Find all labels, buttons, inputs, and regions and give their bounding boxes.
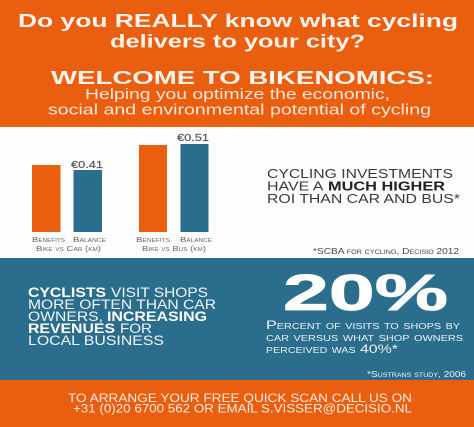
subheading: social and environmental potential of cycling xyxy=(48,102,431,118)
text: ROI statement: MUCH HIGHER xyxy=(328,178,446,194)
panel: header xyxy=(0,0,474,127)
text: statistic description: perceived was 40%* xyxy=(266,342,398,356)
statistic: 20 percent: 20% xyxy=(283,264,448,321)
heading: welcome: WELCOME TO BIKENOMICS: xyxy=(51,68,434,88)
bar: balance bus xyxy=(180,144,208,232)
heading: question: Do you REALLY know what cycling xyxy=(18,11,458,31)
text: ROI statement: CYCLING INVESTMENTS xyxy=(267,166,453,181)
text: cyclists statement: VISIT SHOPS xyxy=(111,285,208,300)
panel: call to action xyxy=(0,380,474,427)
axis labels: bike vs bus: Bike vs Bus (km) xyxy=(142,244,207,253)
panel: ROI chart section xyxy=(0,127,474,258)
text: cyclists statement: MORE OFTEN THAN CAR xyxy=(28,297,216,312)
text: cyclists statement: FOR xyxy=(120,321,152,336)
subheading: Helping you optimize the economic, xyxy=(85,87,390,103)
axis labels: bike vs bus: Balance xyxy=(180,235,213,244)
bar: benefits car xyxy=(32,165,60,232)
text: ROI statement: HAVE A xyxy=(267,178,327,194)
text: contact details: TO ARRANGE YOUR FREE QUICK SCAN CALL US ON xyxy=(68,393,412,405)
text: cyclists statement: INCREASING xyxy=(107,309,207,324)
axis labels: bike vs car: Balance xyxy=(73,235,107,244)
text: cyclists statement: OWNERS, xyxy=(28,309,103,324)
text: contact details: +31 (0)20 6700 562 OR EMAIL S.VISSER@DECISIO.NL xyxy=(73,404,413,416)
text: cyclists statement: CYCLISTS xyxy=(28,285,106,300)
text: cyclists statement: REVENUES xyxy=(28,321,115,336)
bar: benefits bus xyxy=(139,145,167,232)
value: 0.41: €0.41 xyxy=(71,159,103,171)
bar: balance car xyxy=(74,170,102,232)
bar chart: bike vs bus xyxy=(136,132,213,253)
text: cyclists statement: LOCAL BUSINESS xyxy=(28,333,164,348)
axis labels: bike vs bus: Benefits xyxy=(136,235,171,244)
axis labels: bike vs car: Bike vs Car (km) xyxy=(36,244,102,253)
text: statistic description: car versus what shop owners xyxy=(266,330,463,344)
panel: retail section xyxy=(0,258,474,380)
footnote: SCBA source: *SCBA for cycling, Decisio 2012 xyxy=(313,246,459,256)
text: ROI statement: ROI THAN CAR AND BUS* xyxy=(267,191,460,206)
heading: question: delivers to your city? xyxy=(110,32,365,52)
axis labels: bike vs car: Benefits xyxy=(32,235,66,244)
bar chart: bike vs car xyxy=(32,159,107,253)
text: statistic description: Percent of visits to shops by xyxy=(266,318,461,332)
value: 0.51: €0.51 xyxy=(177,132,209,144)
footnote: Sustrans source: *Sustrans study, 2006 xyxy=(367,369,466,379)
